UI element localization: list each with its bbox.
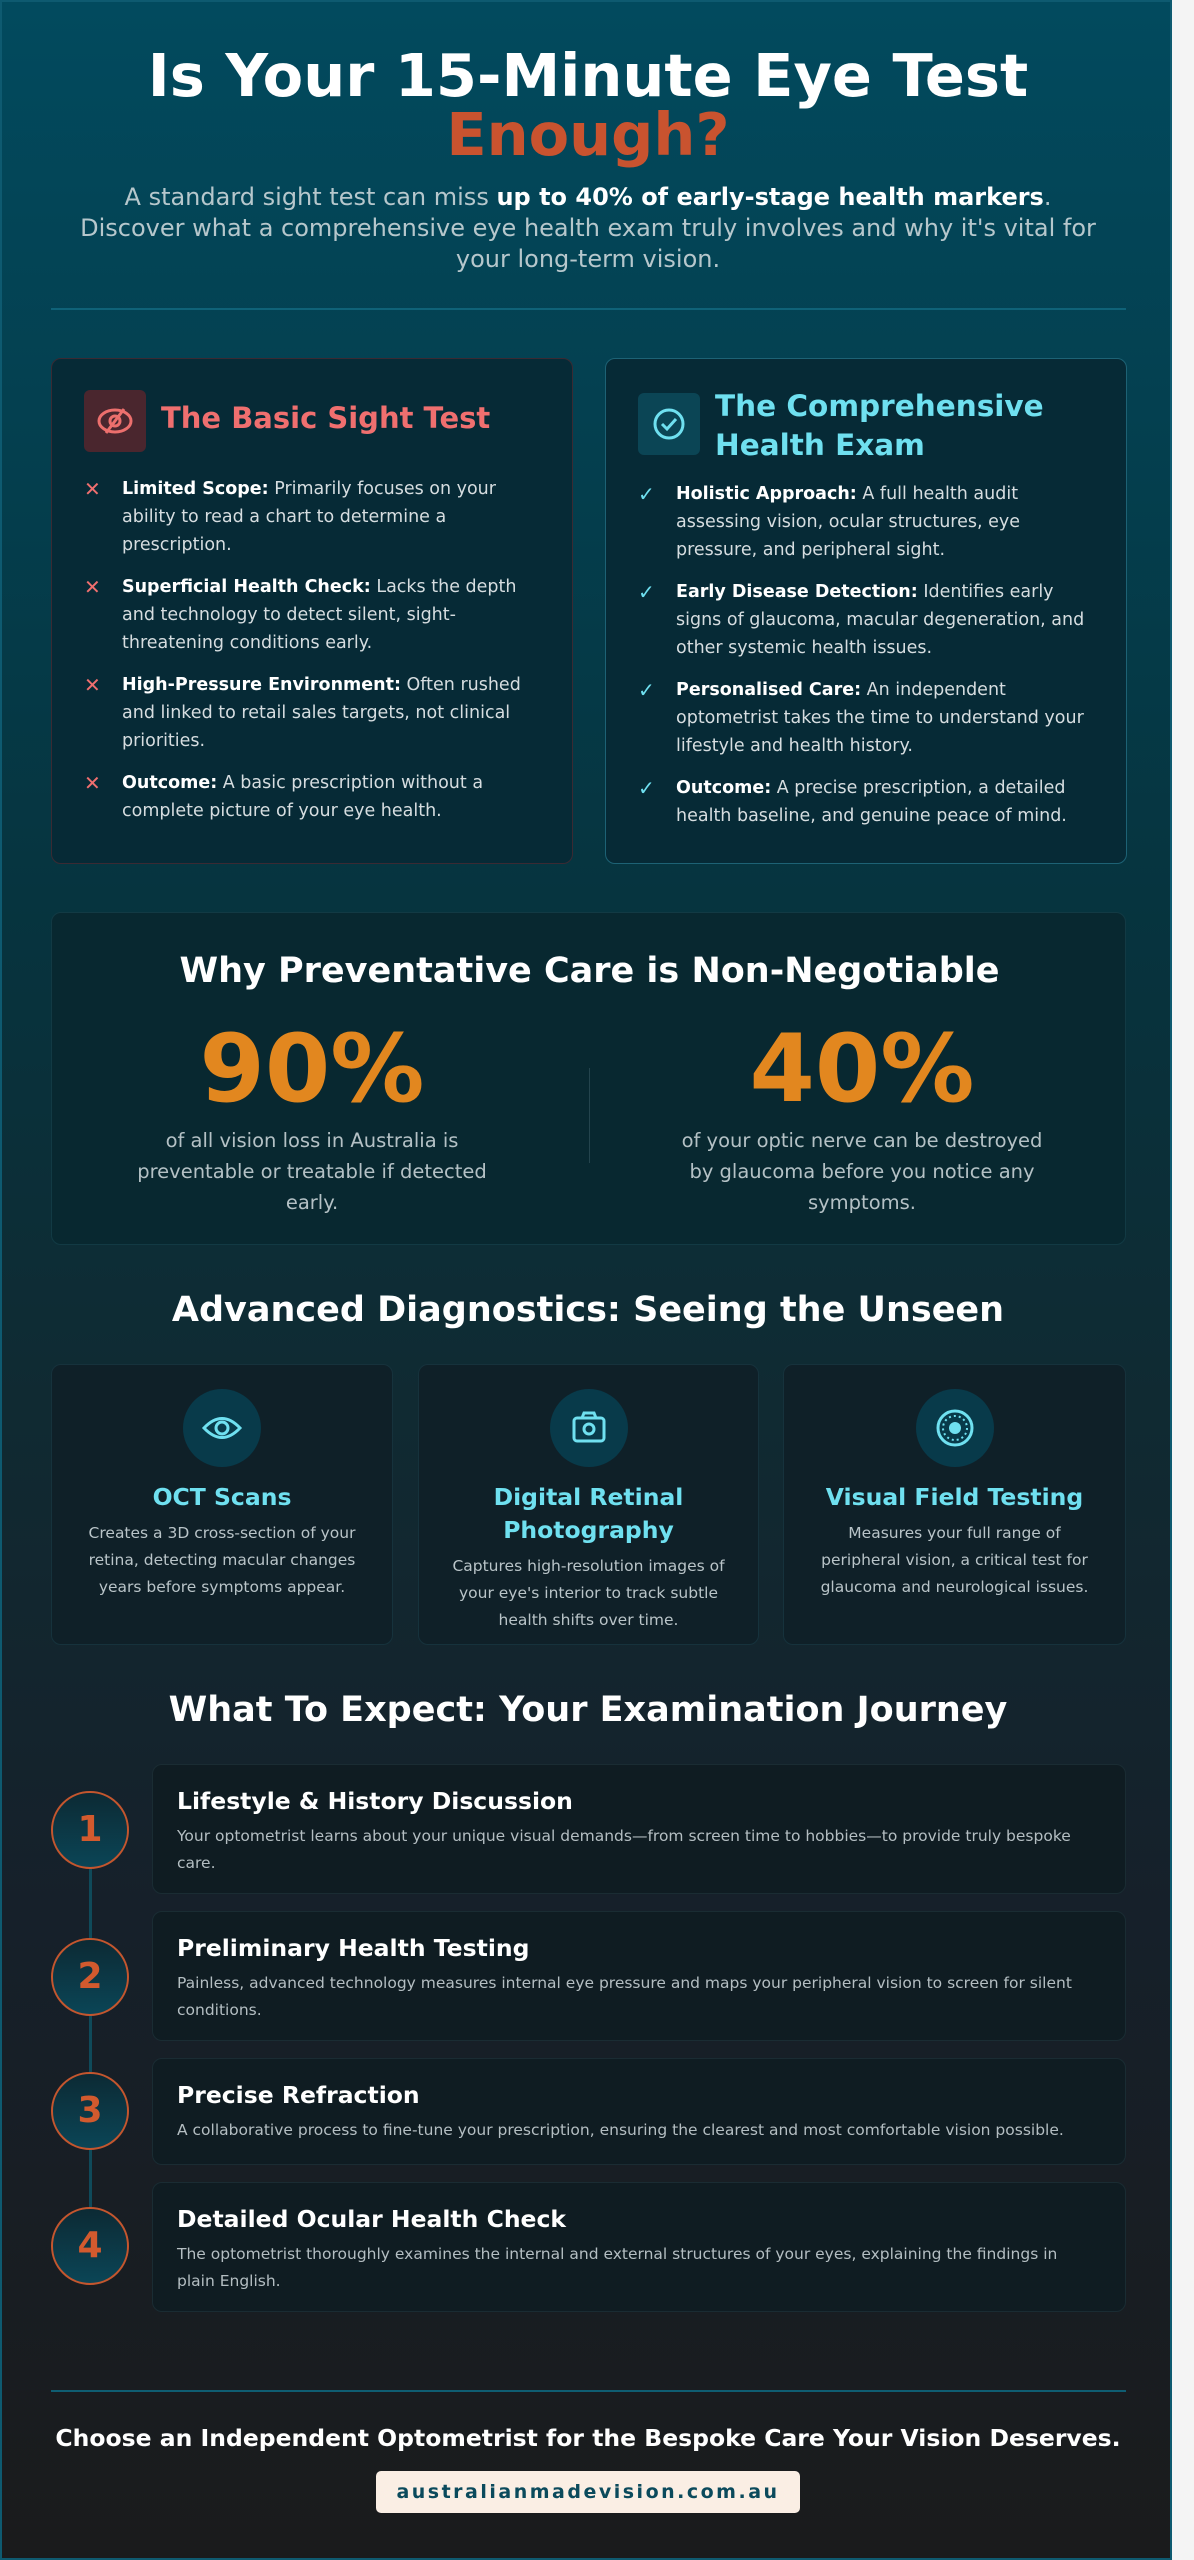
heading: Why Preventative Care is Non-Negotiable <box>179 951 1000 991</box>
step 4 <box>152 2182 1126 2312</box>
panel: basic sight test: ✕ <box>84 673 101 697</box>
stat 90%: 90% <box>200 1015 424 1124</box>
card: retinal photography <box>418 1364 759 1645</box>
step 1: Your optometrist learns about your unique visual demands—from screen time to hobbies—to provide truly bespoke care. <box>177 1827 1071 1872</box>
title: Enough? <box>446 100 730 169</box>
step 2: Painless, advanced technology measures internal eye pressure and maps your peripheral vision to screen for silent conditions. <box>177 1974 1072 2019</box>
list item: Superficial Health Check: Lacks the depth and technology to detect silent, sight-threatening conditions early. <box>122 577 516 653</box>
step 1 <box>152 1764 1126 1894</box>
subtitle: A standard sight test can miss up to 40% of early-stage health markers. <box>125 183 1051 211</box>
number 2: 2 <box>77 1956 103 1997</box>
number 3 <box>51 2072 129 2150</box>
number 3: 3 <box>77 2090 103 2131</box>
stat 40%: of your optic nerve can be destroyed by glaucoma before you notice any symptoms. <box>682 1129 1042 1214</box>
step 4: Detailed Ocular Health Check <box>177 2205 566 2233</box>
panel: basic sight test: ✕ <box>84 477 101 501</box>
list item: High-Pressure Environment: Often rushed and linked to retail sales targets, not clinical priorities. <box>122 675 521 751</box>
list item: Outcome: A basic prescription without a complete picture of your eye health. <box>122 773 483 821</box>
heading <box>715 389 1044 462</box>
number 1 <box>51 1791 129 1869</box>
panel: preventative care stats <box>51 912 1126 1245</box>
number 2 <box>51 1938 129 2016</box>
list item: Early Disease Detection: Identifies early signs of glaucoma, macular degeneration, and other systemic health issues. <box>676 582 1084 658</box>
number 4: 4 <box>77 2225 103 2266</box>
card: OCT <box>51 1364 393 1645</box>
card: visual field: Measures your full range of peripheral vision, a critical test for glaucoma and neurological issues. <box>821 1524 1088 1596</box>
step 3: Precise Refraction <box>177 2081 420 2109</box>
panel: basic sight test: ✕ <box>84 575 101 599</box>
panel: basic sight test: ✕ <box>84 771 101 795</box>
list item: Limited Scope: Primarily focuses on your ability to read a chart to determine a prescription. <box>122 479 496 555</box>
number 4 <box>51 2207 129 2285</box>
icon: field <box>916 1389 994 1467</box>
card: visual field <box>783 1364 1126 1645</box>
card: retinal photography: Captures high-resolution images of your eye's interior to track subtle health shifts over time. <box>452 1557 725 1629</box>
footer url button: australianmadevision.com.au <box>396 2481 780 2503</box>
title <box>148 41 1028 169</box>
step 2 <box>152 1911 1126 2041</box>
panel: comprehensive exam: ✓ <box>638 776 655 800</box>
card: retinal photography: Digital Retinal Photography <box>494 1483 683 1544</box>
list item: Outcome: A precise prescription, a detailed health baseline, and genuine peace of mind. <box>676 778 1067 826</box>
stat 90% <box>137 1015 487 1214</box>
heading: advanced diagnostics: Advanced Diagnostics: Seeing the Unseen <box>172 1290 1004 1330</box>
step 3 <box>152 2058 1126 2165</box>
step 3: A collaborative process to fine-tune your prescription, ensuring the clearest and most comfortable vision possible. <box>177 2121 1064 2139</box>
icon: check circle <box>638 393 700 455</box>
heading: The Basic Sight Test <box>161 401 490 435</box>
footer url button <box>376 2471 800 2513</box>
panel: comprehensive exam <box>605 358 1127 864</box>
number 1: 1 <box>77 1809 103 1850</box>
stat 90%: of all vision loss in Australia is preventable or treatable if detected early. <box>137 1129 487 1214</box>
icon: camera <box>550 1389 628 1467</box>
subtitle <box>80 183 1096 273</box>
footer text: Choose an Independent Optometrist for the Bespoke Care Your Vision Deserves. <box>55 2424 1121 2452</box>
step 1: Lifestyle & History Discussion <box>177 1787 573 1815</box>
stat 40% <box>682 1015 1042 1214</box>
panel: comprehensive exam: ✓ <box>638 678 655 702</box>
panel: comprehensive exam: ✓ <box>638 482 655 506</box>
step 4: The optometrist thoroughly examines the internal and external structures of your eyes, explaining the findings in plain English. <box>177 2245 1057 2290</box>
heading: journey: What To Expect: Your Examination Journey <box>169 1690 1007 1730</box>
card: OCT: Creates a 3D cross-section of your retina, detecting macular changes years before symptoms appear. <box>89 1524 355 1596</box>
heading: The Comprehensive <box>715 389 1044 423</box>
panel: basic sight test <box>51 358 573 864</box>
icon: crossed eye <box>84 390 146 452</box>
subtitle: Discover what a comprehensive eye health exam truly involves and why it's vital for your long-term vision. <box>80 214 1096 273</box>
card: visual field: Visual Field Testing <box>826 1483 1083 1511</box>
panel: comprehensive exam: ✓ <box>638 580 655 604</box>
stat 40%: 40% <box>750 1015 974 1124</box>
card: OCT: OCT Scans <box>153 1483 291 1511</box>
title: Is Your 15-Minute Eye Test <box>148 41 1028 110</box>
icon: eye <box>183 1389 261 1467</box>
heading: Health Exam <box>715 428 925 462</box>
list item: Holistic Approach: A full health audit assessing vision, ocular structures, eye pressure, and peripheral sight. <box>676 484 1020 560</box>
step 2: Preliminary Health Testing <box>177 1934 529 1962</box>
list item: Personalised Care: An independent optometrist takes the time to understand your lifestyle and health history. <box>676 680 1084 756</box>
